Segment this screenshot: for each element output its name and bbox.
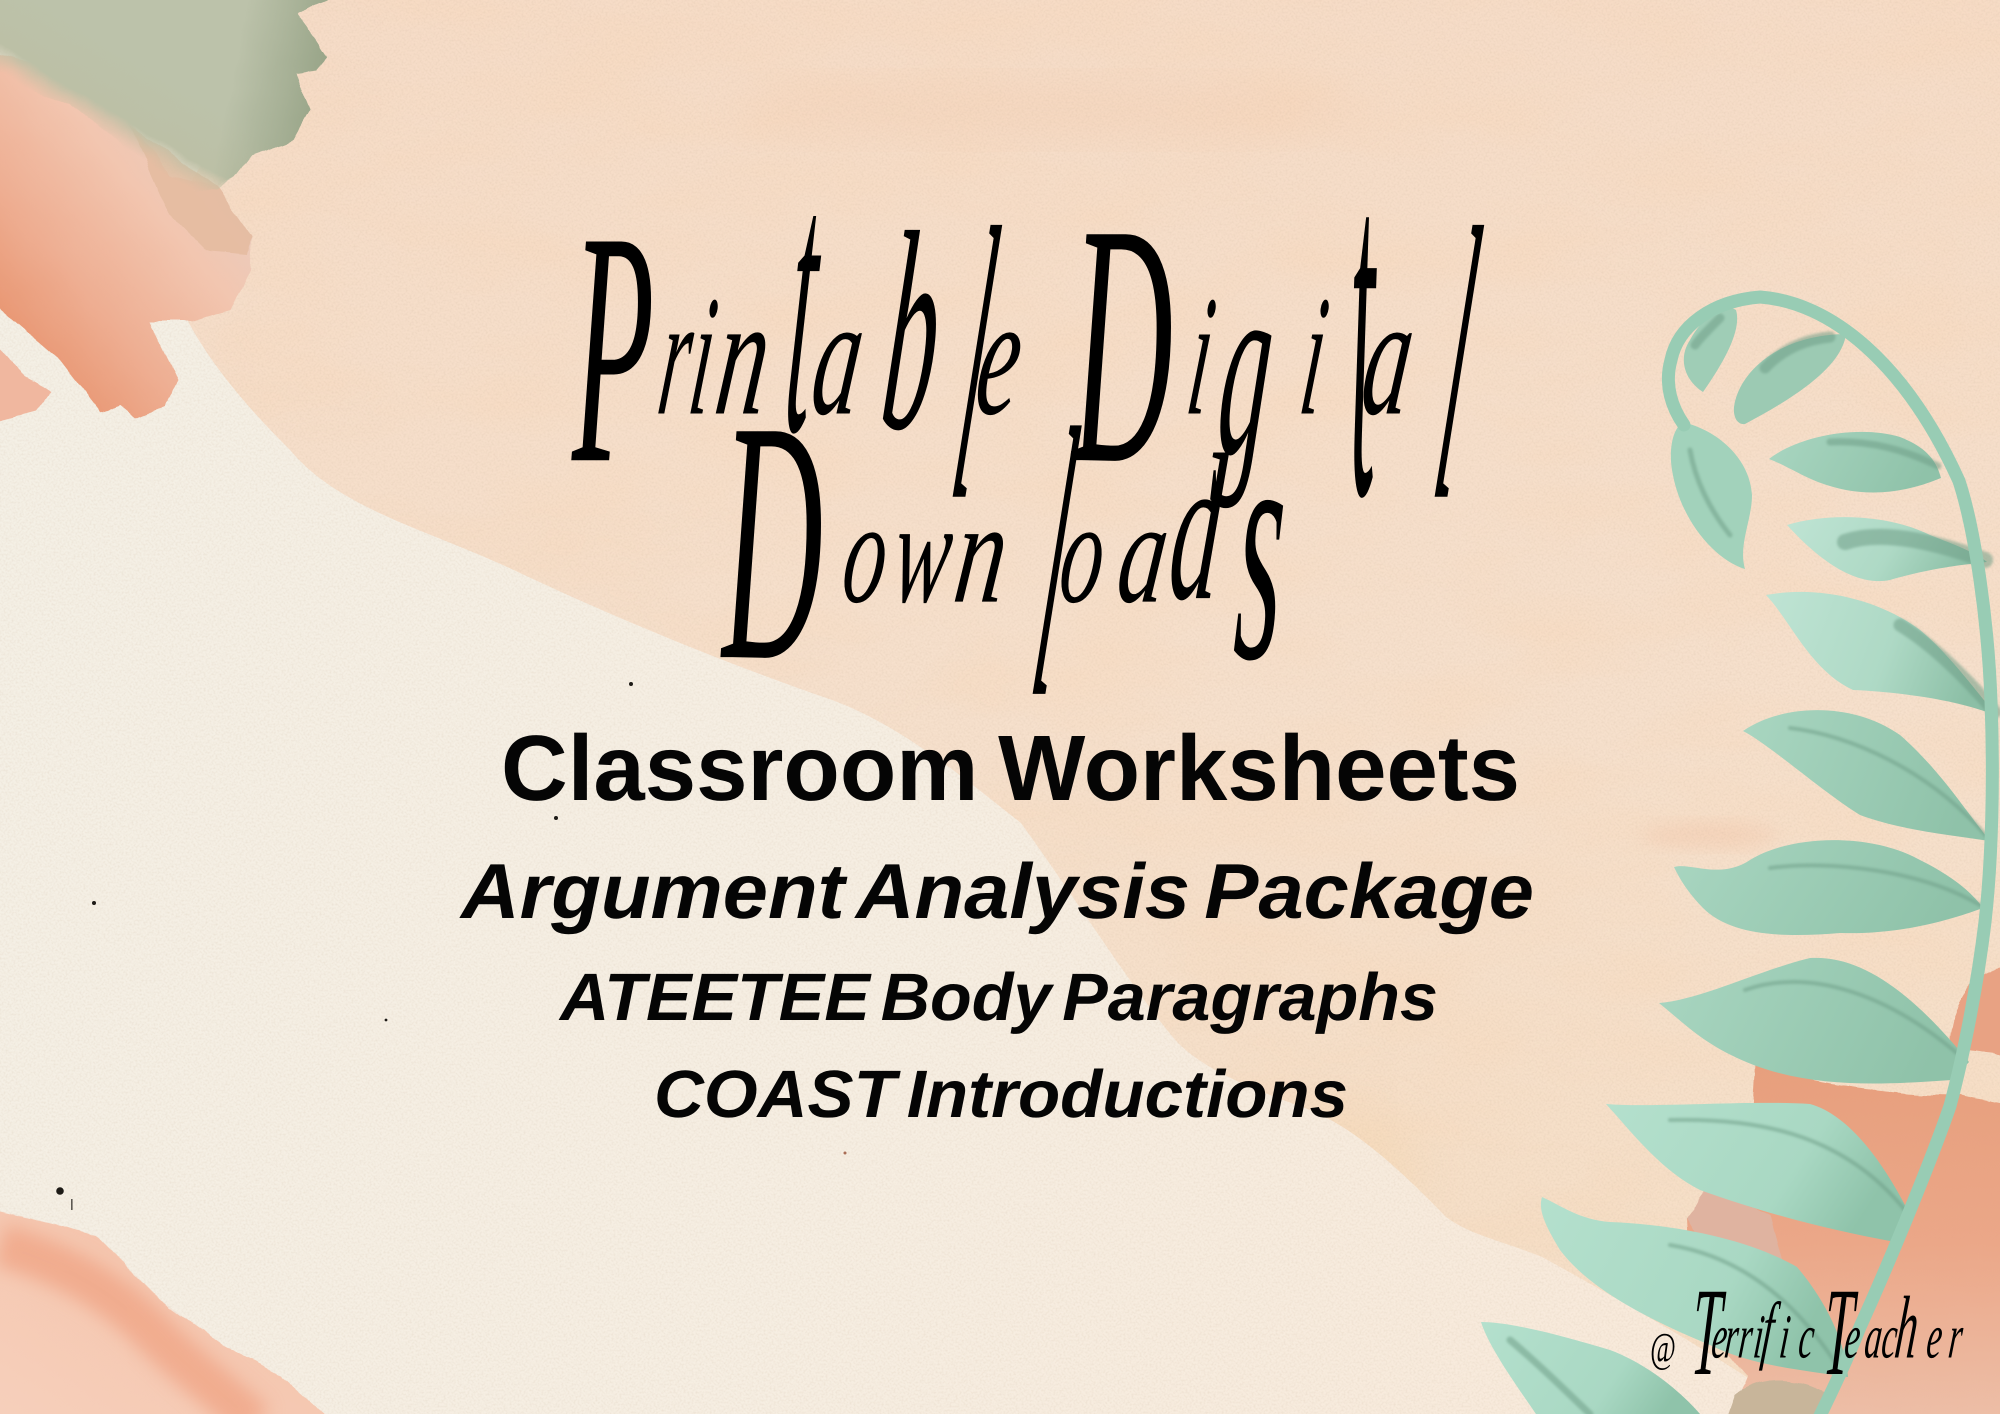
leaf: twelfth: [1481, 1322, 1705, 1414]
title: Printable Digital Downloads: w: [885, 471, 962, 634]
author handle: @TerrificTeacher: i: [1751, 1301, 1767, 1371]
author handle: @TerrificTeacher: a: [1862, 1301, 1886, 1371]
author handle: @TerrificTeacher: e: [1842, 1301, 1864, 1371]
watercolor: bottom-right orange washes: [1686, 966, 2000, 1414]
leaf: sixth: [1766, 592, 1997, 716]
author handle: @TerrificTeacher: T: [1821, 1260, 1857, 1402]
title: Printable Digital Downloads: [571, 57, 1495, 779]
title: Printable Digital Downloads: o: [835, 471, 898, 634]
watercolor: top-left sage green stroke: [0, 0, 335, 192]
title: Printable Digital Downloads: o: [1052, 471, 1115, 634]
title: Printable Digital Downloads: l: [1018, 350, 1093, 779]
author handle: @TerrificTeacher: f: [1758, 1286, 1778, 1371]
title: Printable Digital Downloads: P: [572, 163, 654, 534]
author handle: @TerrificTeacher: c: [1796, 1301, 1818, 1371]
author handle: @TerrificTeacher: e: [1709, 1301, 1731, 1371]
leaf: top curl small: [1684, 308, 1737, 392]
title: Printable Digital Downloads: a: [1354, 261, 1424, 452]
title: Printable Digital Downloads: r: [651, 261, 703, 452]
leaf: fourth: [1769, 432, 1941, 493]
subheading: COAST Introductions: COAST Introductions: [654, 1057, 1348, 1132]
title: Printable Digital Downloads: s: [1228, 360, 1294, 731]
author handle: @TerrificTeacher: [1650, 1260, 1966, 1402]
leaf: ninth: [1659, 958, 1969, 1084]
title: Printable Digital Downloads: D: [1072, 153, 1173, 536]
author handle: @TerrificTeacher: h: [1891, 1277, 1924, 1377]
stem: [1668, 297, 1992, 1414]
leaf: eleventh: [1541, 1197, 1848, 1377]
icon: fern branch: [1481, 297, 1997, 1414]
leaf: hanging: [1671, 423, 1752, 569]
leaf: top curl wide: [1734, 334, 1846, 424]
subheading: ATEETEE Body Paragraphs: ATEETEE Body Paragraphs: [558, 960, 1438, 1035]
author handle: @TerrificTeacher: r: [1736, 1301, 1756, 1371]
title: Printable Digital Downloads: l: [938, 148, 1013, 583]
title: Printable Digital Downloads: g: [1209, 222, 1284, 510]
title: Printable Digital Downloads: a: [804, 261, 874, 452]
author handle: @TerrificTeacher: c: [1879, 1301, 1901, 1371]
watercolor: top-left coral stroke: [0, 52, 252, 424]
title: Printable Digital Downloads: t: [1350, 57, 1375, 601]
title: Printable Digital Downloads: d: [1162, 412, 1232, 645]
leaf: seventh: [1743, 710, 1990, 841]
author handle: @TerrificTeacher: @: [1650, 1323, 1676, 1371]
leaf: tenth: [1606, 1103, 1909, 1242]
paper specks: [56, 682, 846, 1210]
title: Printable Digital Downloads: i: [1293, 261, 1337, 452]
title: Printable Digital Downloads: t: [776, 92, 831, 514]
title: Printable Digital Downloads: l: [1420, 148, 1495, 583]
author handle: @TerrificTeacher: i: [1777, 1301, 1793, 1371]
author handle: @TerrificTeacher: e: [1924, 1301, 1946, 1371]
title: Printable Digital Downloads: D: [722, 350, 823, 733]
title: Printable Digital Downloads: b: [873, 174, 953, 491]
leaf: eighth: [1674, 840, 1983, 935]
author handle: @TerrificTeacher: r: [1722, 1301, 1742, 1371]
title: Printable Digital Downloads: i: [682, 261, 726, 452]
leaf shading strokes: [1510, 318, 1995, 1414]
title: Printable Digital Downloads: a: [1110, 471, 1178, 634]
title: Printable Digital Downloads: i: [1180, 261, 1224, 452]
author handle: @TerrificTeacher: T: [1689, 1260, 1725, 1402]
title: Printable Digital Downloads: e: [968, 261, 1033, 452]
author handle: @TerrificTeacher: r: [1946, 1301, 1966, 1371]
title: Printable Digital Downloads: n: [947, 471, 1017, 634]
leaf: fifth: [1787, 517, 1987, 581]
title: Printable Digital Downloads: n: [708, 261, 781, 452]
heading: Classroom Worksheets: Classroom Worksheets: [501, 716, 1520, 820]
subheading: Argument Analysis Package: Argument Analysis Package: [459, 847, 1534, 935]
watercolor: bottom-left orange wash: [0, 1208, 335, 1414]
